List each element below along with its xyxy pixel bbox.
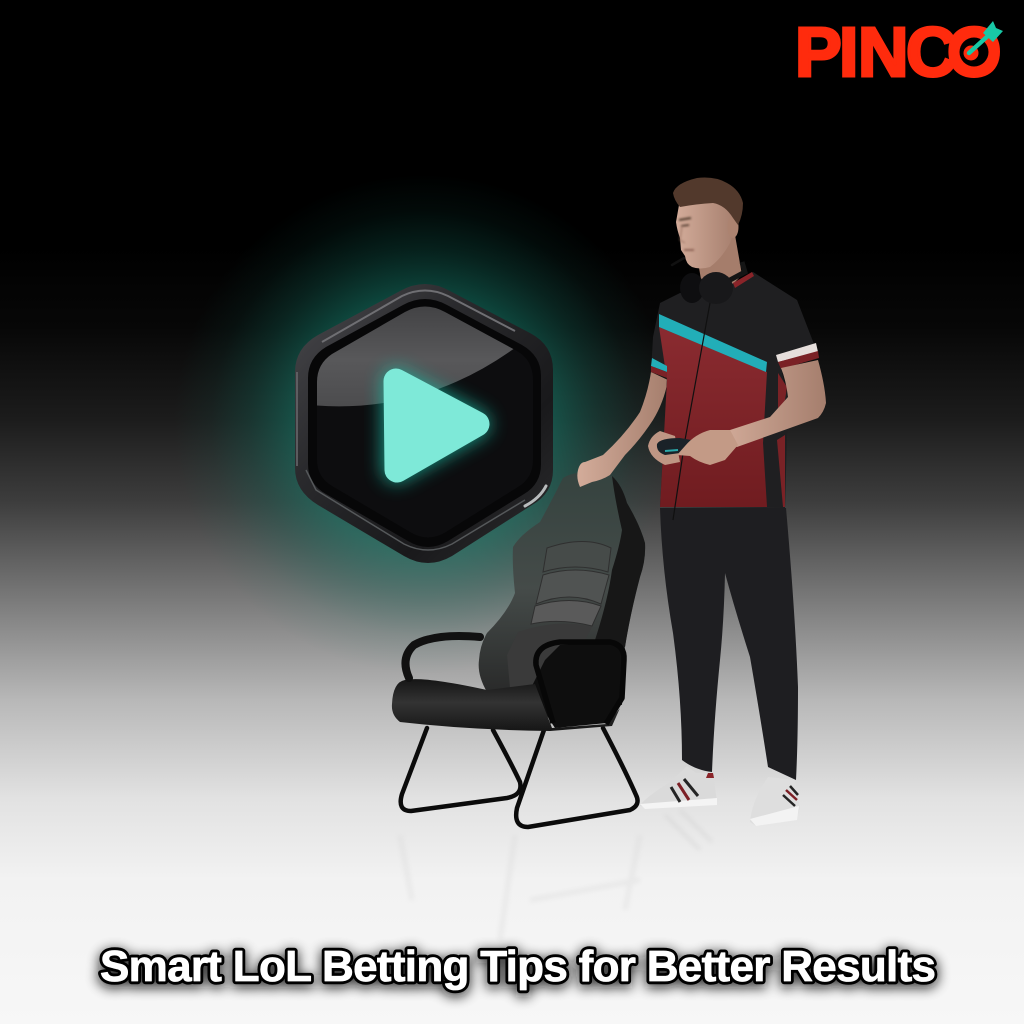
- right arm: [720, 360, 826, 447]
- chair lumbar pad: [507, 623, 592, 690]
- title: [100, 942, 936, 994]
- badge glossy face: [317, 306, 514, 406]
- person: [577, 178, 826, 826]
- play triangle glow: [396, 382, 476, 469]
- title text: Smart LoL Betting Tips for Better Results: [100, 942, 936, 991]
- play badge: [295, 284, 553, 563]
- floor reflection: [400, 810, 712, 940]
- collar: [733, 272, 754, 288]
- chair seat: [392, 679, 620, 731]
- play triangle: [396, 381, 477, 470]
- title shadow: Smart LoL Betting Tips for Better Results: [100, 945, 936, 994]
- title outline: Smart LoL Betting Tips for Better Results: [100, 942, 936, 991]
- chair shadow block: [530, 642, 625, 728]
- face: [676, 198, 736, 268]
- left arm and hand: [577, 372, 668, 487]
- shirt: [651, 272, 819, 508]
- chair left armrest: [405, 636, 480, 678]
- shirt red panel: [659, 327, 767, 507]
- chair backrest: [479, 472, 645, 705]
- chair back cushions: [531, 542, 611, 626]
- neck: [698, 235, 742, 287]
- headset cable: [673, 303, 710, 520]
- teal glow behind badge: [174, 174, 674, 674]
- trousers: [660, 508, 798, 780]
- right sneaker: [750, 777, 800, 826]
- hair: [673, 178, 743, 225]
- headset mic: [672, 258, 684, 265]
- left sleeve cuff: [651, 358, 667, 372]
- logo arrow: [969, 21, 1003, 53]
- head: [673, 178, 743, 268]
- gaming chair: [392, 472, 645, 827]
- logo target: [949, 27, 999, 77]
- headphones: [680, 262, 745, 304]
- shirt side panels: [778, 373, 787, 410]
- controller light: [665, 450, 678, 451]
- right sleeve cuff: [776, 343, 818, 362]
- rim highlights: [322, 290, 515, 342]
- game controller: [657, 438, 697, 455]
- left sneaker: [640, 766, 717, 809]
- chair right bolster: [595, 476, 645, 647]
- badge outer rim: [295, 284, 553, 563]
- shirt teal stripe: [659, 314, 767, 372]
- ear: [728, 216, 738, 238]
- face details: [679, 218, 694, 250]
- logo: PINCO: PINCO: [795, 13, 1001, 91]
- chair sled legs: [401, 727, 638, 827]
- left hand on controller: [648, 431, 680, 465]
- badge rim groove: [308, 299, 541, 547]
- right hand on controller: [677, 430, 738, 465]
- chair right armrest: [536, 642, 624, 724]
